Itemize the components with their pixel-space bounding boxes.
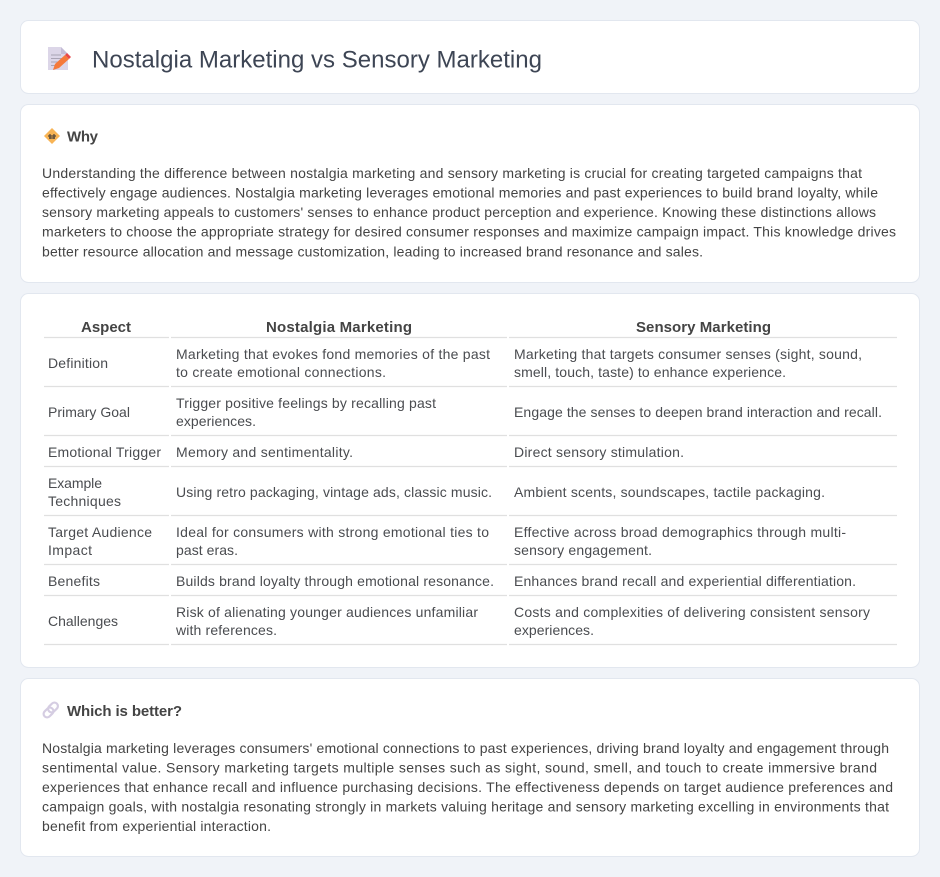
row: emotional trigger: Emotional Trigger xyxy=(48,444,161,460)
row: primary goal: Trigger positive feelings by recalling past xyxy=(176,395,436,411)
title: Nostalgia Marketing vs Sensory Marketing xyxy=(92,46,542,74)
text block: which is better: sentimental value. Sensory marketing targets multiple senses such as sight, sound, smell, and touch to create immersive brand xyxy=(42,760,877,776)
row: example techniques: Ambient scents, soundscapes, tactile packaging. xyxy=(514,484,825,500)
row: challenges xyxy=(48,604,870,638)
row: primary goal: Primary Goal xyxy=(48,404,130,420)
row: example techniques xyxy=(48,475,825,509)
row: definition: to create emotional connections. xyxy=(176,364,386,380)
icon: link xyxy=(42,701,59,719)
row: target audience impact: Target Audience xyxy=(48,524,152,540)
row: target audience impact xyxy=(48,524,846,558)
row: emotional trigger: Memory and sentimentality. xyxy=(176,444,353,460)
table header xyxy=(81,319,771,336)
heading: why: Why xyxy=(67,128,99,146)
row: emotional trigger: Direct sensory stimulation. xyxy=(514,444,684,460)
text block: which is better xyxy=(42,740,893,834)
row: primary goal xyxy=(48,395,882,429)
icon: warning diamond xyxy=(44,128,60,144)
panel: comparison table xyxy=(20,294,920,668)
row: example techniques: Example xyxy=(48,475,102,491)
panel: why xyxy=(20,104,920,282)
row: target audience impact: past eras. xyxy=(176,542,238,558)
panel: title header xyxy=(20,20,920,94)
row: challenges: Costs and complexities of delivering consistent sensory xyxy=(514,604,870,620)
row: target audience impact: sensory engagement. xyxy=(514,542,652,558)
text block: which is better: Nostalgia marketing leverages consumers' emotional connections to past experiences, driving brand loyalty and engagement through xyxy=(42,740,889,756)
row: primary goal: experiences. xyxy=(176,413,256,429)
table header: Aspect xyxy=(81,319,131,336)
text block: why xyxy=(42,165,896,260)
row: benefits: Builds brand loyalty through emotional resonance. xyxy=(176,573,494,589)
row: benefits: Benefits xyxy=(48,573,100,589)
row: definition: Marketing that evokes fond memories of the past xyxy=(176,346,490,362)
row: definition xyxy=(48,346,862,380)
row: benefits xyxy=(48,573,856,589)
text block: which is better: campaign goals, with nostalgia resonating strongly in markets valuing heritage and sensory marketing excelling in environments that xyxy=(42,798,889,814)
row: challenges: experiences. xyxy=(514,622,594,638)
text block: which is better: experiences that enhance recall and influence purchasing decisions. The effectiveness depends on target audience preferences and xyxy=(42,779,893,795)
row: challenges: with references. xyxy=(175,622,277,638)
table header: Sensory Marketing xyxy=(636,319,771,336)
text block: which is better: benefit from experiential interaction. xyxy=(42,818,271,834)
table header: Nostalgia Marketing xyxy=(266,319,412,336)
heading: which is better: Which is better? xyxy=(67,703,182,720)
row: primary goal: Engage the senses to deepen brand interaction and recall. xyxy=(514,404,882,420)
row: example techniques: Using retro packaging, vintage ads, classic music. xyxy=(176,484,492,500)
text block: why: Understanding the difference between nostalgia marketing and sensory marketing is crucial for creating targeted campaigns that xyxy=(42,165,862,181)
icon: document with pencil xyxy=(48,47,71,70)
row: emotional trigger xyxy=(48,444,684,460)
row: definition: Marketing that targets consumer senses (sight, sound, xyxy=(514,346,862,362)
text block: why: better resource allocation and message customization, leading to increased brand resonance and sales. xyxy=(42,244,703,260)
row: target audience impact: Impact xyxy=(48,542,92,558)
row: challenges: Challenges xyxy=(48,613,118,629)
row: challenges: Risk of alienating younger audiences unfamiliar xyxy=(176,604,478,620)
row: example techniques: Techniques xyxy=(48,493,121,509)
row: target audience impact: Ideal for consumers with strong emotional ties to xyxy=(176,524,489,540)
row: definition: smell, touch, taste) to enhance experience. xyxy=(514,364,786,380)
row: target audience impact: Effective across broad demographics through multi- xyxy=(514,524,846,540)
text block: why: marketers to choose the appropriate strategy for desired consumer responses and maximize campaign impact. This knowledge drives xyxy=(42,224,896,240)
row: definition: Definition xyxy=(48,355,108,371)
text block: why: sensory marketing appeals to customers' senses to enhance product perception and experience. Knowing these distinctions allows xyxy=(42,204,876,220)
panel: which is better xyxy=(20,678,920,856)
text block: why: effectively engage audiences. Nostalgia marketing leverages emotional memories and past experiences to build brand loyalty, while xyxy=(42,184,878,200)
row: benefits: Enhances brand recall and experiential differentiation. xyxy=(514,573,856,589)
